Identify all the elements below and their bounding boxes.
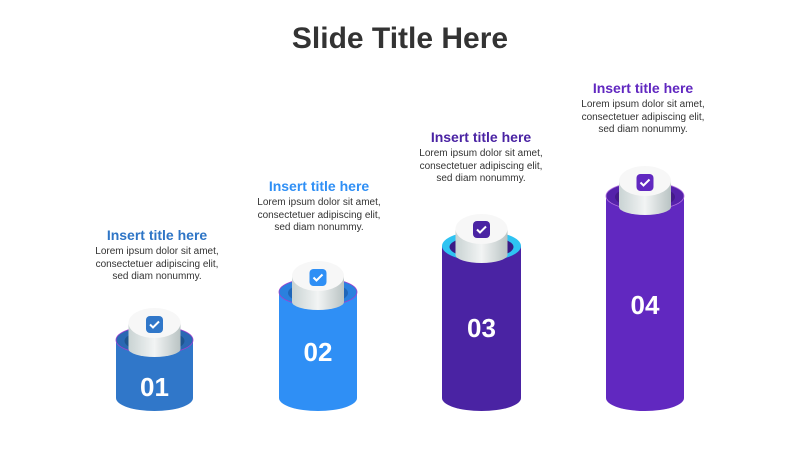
cylinder 04: 04 — [631, 290, 660, 320]
text block 3: Insert title here — [431, 129, 531, 145]
text block 4 — [581, 80, 705, 135]
text block 3: sed diam nonummy. — [436, 173, 526, 184]
text block 4: Lorem ipsum dolor sit amet, — [581, 99, 705, 110]
text block 2: Insert title here — [269, 178, 369, 194]
text block 2: Lorem ipsum dolor sit amet, — [257, 197, 381, 208]
cylinder 04 — [606, 166, 684, 411]
cylinder 01: 01 — [140, 372, 169, 402]
text block 2 — [257, 178, 381, 233]
text block 2: consectetuer adipiscing elit, — [258, 210, 380, 220]
cylinder 03 — [442, 214, 521, 411]
cylinder 03: 03 — [467, 313, 496, 343]
text block 1: Insert title here — [107, 227, 207, 243]
text block 1 — [95, 227, 219, 282]
text block 2: sed diam nonummy. — [274, 222, 364, 233]
text block 1: consectetuer adipiscing elit, — [96, 258, 218, 270]
cylinder 02 — [279, 261, 357, 411]
text block 4: Insert title here — [593, 80, 693, 96]
text block 3: Lorem ipsum dolor sit amet, — [419, 148, 543, 159]
text block 1: sed diam nonummy. — [112, 271, 202, 282]
text block 4: consectetuer adipiscing elit, — [582, 112, 704, 122]
cylinder 01 — [116, 308, 193, 411]
cylinder 02: 02 — [304, 337, 332, 367]
text block 3: consectetuer adipiscing elit, — [420, 160, 542, 172]
text block 3 — [419, 129, 543, 184]
text block 4: sed diam nonummy. — [598, 124, 688, 135]
text block 1: Lorem ipsum dolor sit amet, — [95, 246, 219, 257]
title: Slide Title Here — [292, 22, 508, 55]
